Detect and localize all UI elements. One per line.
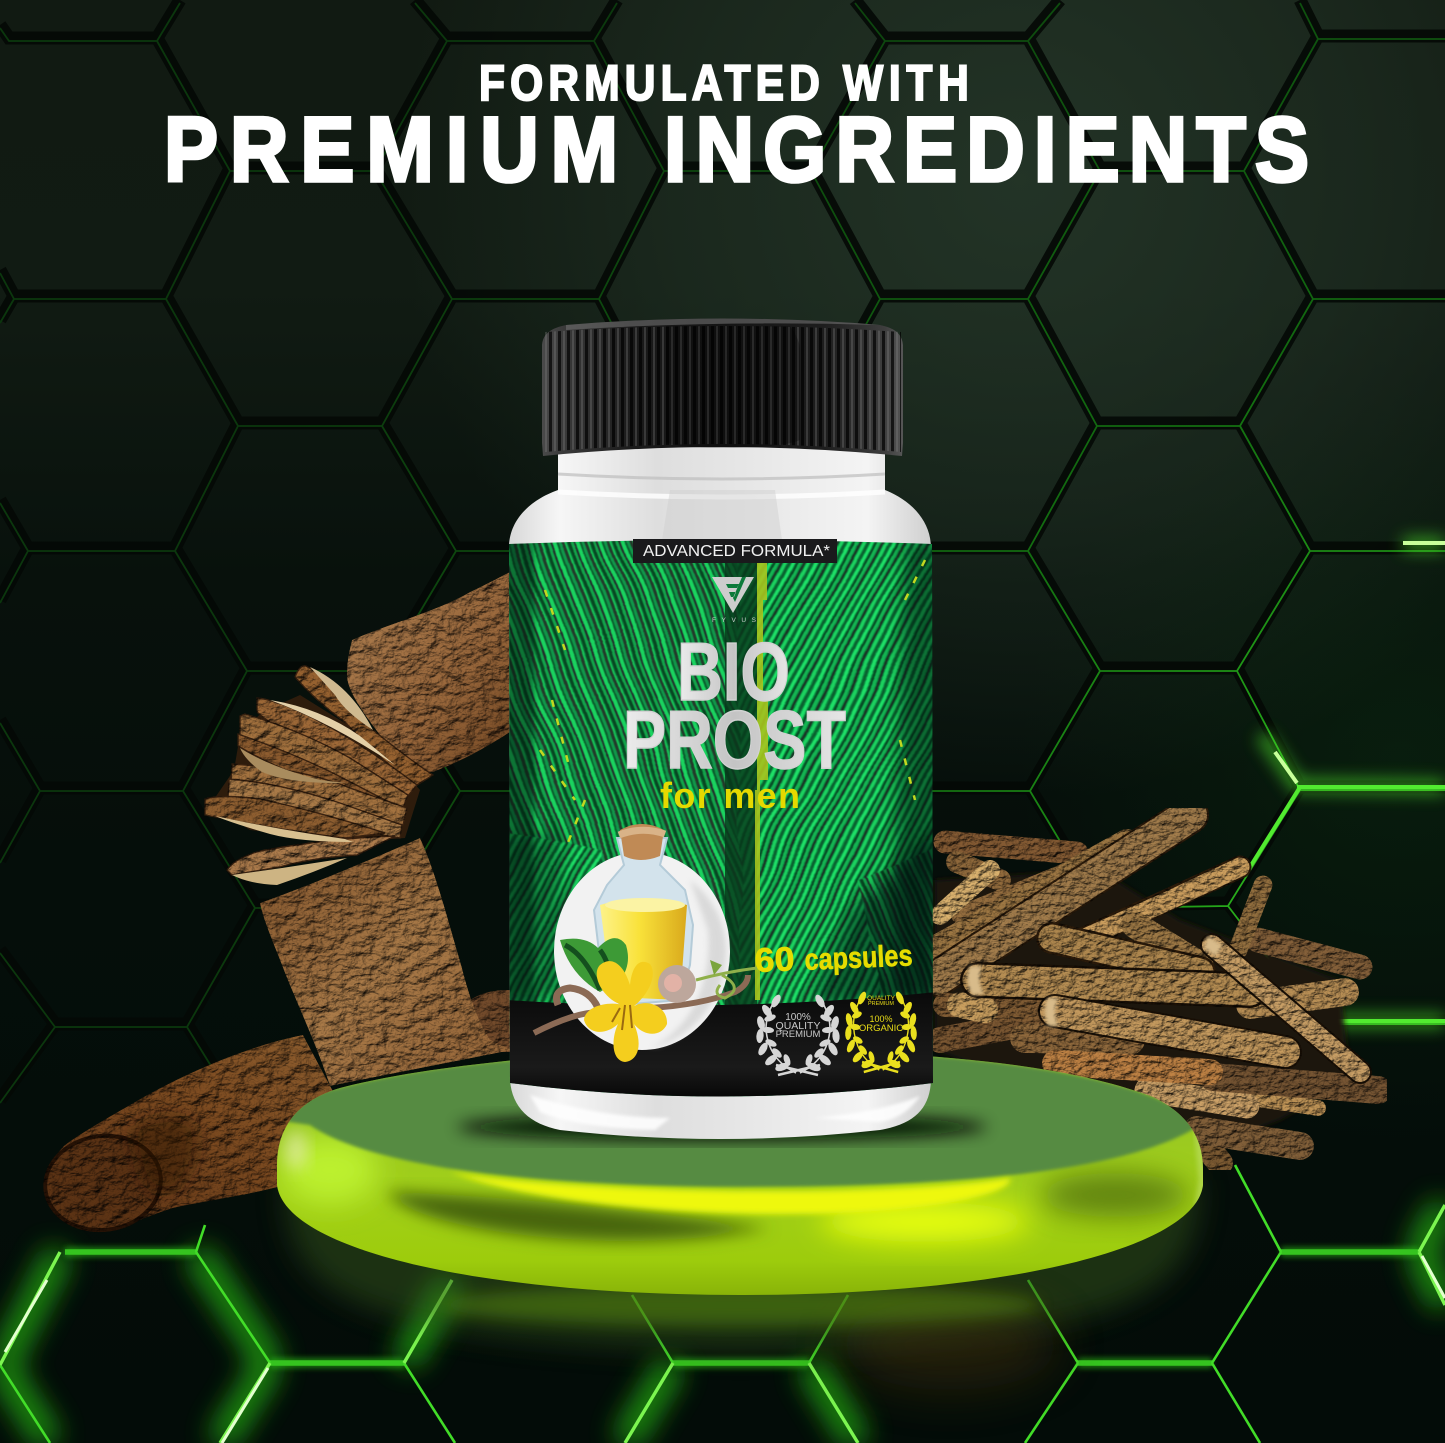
advanced formula banner: ADVANCED FORMULA* bbox=[643, 543, 830, 560]
product name BIO PROST: PROST bbox=[623, 693, 846, 786]
badge: gold organic wreath: 100% bbox=[869, 1014, 893, 1024]
title line 1 bbox=[479, 55, 969, 111]
title line 2: INGREDIENTS bbox=[664, 99, 1309, 201]
bottle neck and shoulder bbox=[509, 446, 931, 1139]
title line 2 bbox=[164, 99, 1309, 201]
platform top surface bbox=[277, 1050, 1197, 1187]
product name BIO PROST: BIO bbox=[677, 625, 790, 718]
badge: gold organic wreath: QUALITY bbox=[867, 995, 896, 1002]
badge: silver quality premium wreath bbox=[756, 993, 840, 1075]
title line 2: PREMIUM bbox=[164, 99, 618, 201]
capsule count: capsules bbox=[804, 939, 913, 977]
badge: gold organic wreath bbox=[845, 990, 917, 1072]
lower cassava log bbox=[48, 1035, 335, 1230]
cassava trunk bbox=[260, 838, 512, 1086]
title line 1: WITH bbox=[843, 55, 969, 111]
illustration: oil bottle, leaf, flower and root bbox=[534, 824, 757, 1062]
capsule count: 60 bbox=[754, 940, 795, 980]
title bbox=[164, 55, 1309, 201]
green leaf bbox=[560, 938, 628, 992]
platform reflection on the floor bbox=[285, 1180, 1200, 1390]
image: cassava roots and slices bbox=[39, 572, 512, 1238]
badge: silver quality premium wreath: 100% bbox=[785, 1012, 811, 1023]
glass oil bottle bbox=[594, 838, 693, 1005]
icon: FYVUS brand logo: FYVUS bbox=[712, 617, 757, 624]
label: green palm leaf artwork bbox=[509, 540, 933, 1096]
twig root and vine bbox=[534, 975, 748, 1033]
log shading bbox=[130, 1116, 198, 1192]
badge: gold organic wreath: ORGANIC bbox=[859, 1023, 903, 1034]
supplement bottle bbox=[509, 318, 933, 1139]
yellow flower bbox=[584, 961, 667, 1062]
white circle background bbox=[554, 852, 730, 1050]
subtitle for men: for men bbox=[660, 775, 800, 816]
round root bulb bbox=[658, 965, 696, 1003]
title line 1: FORMULATED bbox=[479, 55, 820, 111]
green display platform bbox=[270, 1040, 1210, 1300]
cassava cut end bbox=[39, 1128, 167, 1238]
platform highlight band bbox=[450, 1172, 1010, 1214]
product name BIO PROST bbox=[623, 625, 846, 786]
badge: gold organic wreath: PREMIUM bbox=[868, 1001, 894, 1007]
bottle cap bbox=[542, 318, 903, 456]
upper cassava log bbox=[347, 572, 510, 772]
platform side bbox=[270, 1040, 1210, 1300]
icon: FYVUS brand logo bbox=[712, 577, 757, 624]
bottle contact shadow bbox=[457, 1114, 987, 1140]
image: pile of ashwagandha roots bbox=[935, 815, 1378, 1163]
cassava slice pale faces bbox=[215, 667, 395, 885]
advanced formula banner bbox=[633, 539, 837, 563]
bottle base highlight bbox=[530, 1095, 670, 1130]
label: black lower band bbox=[505, 992, 937, 1100]
badge: silver quality premium wreath: QUALITY bbox=[776, 1020, 820, 1032]
cork stopper bbox=[620, 824, 664, 860]
hexagon wall grid bbox=[0, 0, 1445, 1143]
hexagon floor grid with neon glow bbox=[0, 1165, 1445, 1443]
product label bbox=[509, 540, 933, 1096]
badge: silver quality premium wreath: PREMIUM bbox=[776, 1029, 821, 1040]
right root stub behind trunk bbox=[470, 990, 512, 1052]
cassava slices bark bbox=[205, 666, 433, 875]
capsule count bbox=[754, 935, 913, 980]
